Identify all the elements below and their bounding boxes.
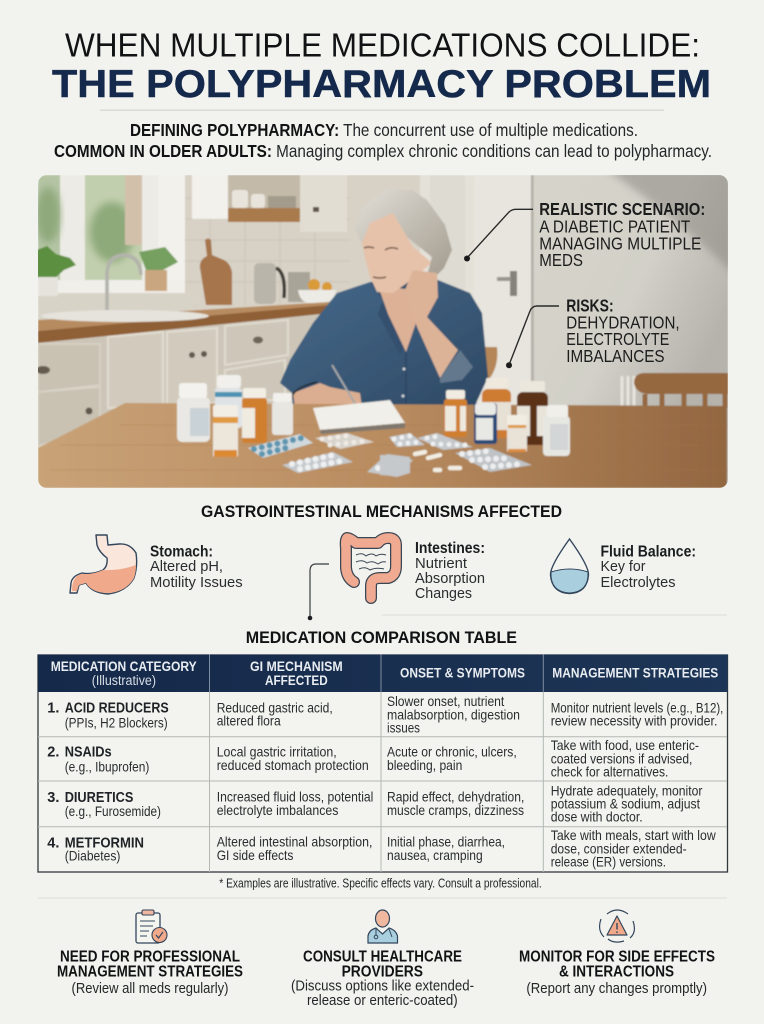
row 4: metformin: nausea, cramping bbox=[387, 847, 483, 863]
face bbox=[362, 213, 432, 293]
row 3: diuretics: Rapid effect, dehydration, bbox=[387, 789, 524, 805]
fluid balance text: Key for bbox=[600, 558, 646, 575]
table bbox=[38, 403, 727, 488]
row 2: NSAIDs: Acute or chronic, ulcers, bbox=[387, 744, 517, 760]
consult healthcare providers text: (Discuss options like extended- bbox=[291, 978, 474, 995]
row 1: acid reducers: ACID REDUCERS bbox=[65, 701, 169, 717]
row 2: NSAIDs: coated versions if advised, bbox=[551, 750, 692, 766]
table header: MANAGEMENT STRATEGIES bbox=[552, 665, 718, 680]
faucet bbox=[107, 255, 141, 310]
row 3: diuretics bbox=[47, 782, 703, 825]
row 1: acid reducers: Monitor nutrient levels (e.g., B12), bbox=[551, 699, 723, 715]
stomach text: Stomach: bbox=[150, 544, 213, 561]
row 3: diuretics: dose with doctor. bbox=[551, 809, 643, 825]
fluid balance text bbox=[600, 544, 696, 591]
consult healthcare providers text: CONSULT HEALTHCARE bbox=[303, 949, 462, 966]
intestines text: Intestines: bbox=[415, 540, 485, 557]
woman bbox=[280, 189, 488, 415]
consult healthcare providers text bbox=[291, 949, 474, 1009]
connector line bbox=[308, 564, 329, 620]
need for professional management text: (Review all meds regularly) bbox=[72, 980, 229, 997]
title: WHEN MULTIPLE MEDICATIONS COLLIDE: bbox=[65, 26, 700, 64]
fluid balance text: Fluid Balance: bbox=[600, 544, 696, 561]
left bottle group bbox=[177, 375, 293, 457]
heading: gastrointestinal mechanisms: GASTROINTESTINAL MECHANISMS AFFECTED bbox=[201, 503, 562, 521]
intestines text: Changes bbox=[415, 585, 472, 602]
need for professional management text bbox=[57, 949, 243, 997]
row 2: NSAIDs: bleeding, pain bbox=[387, 757, 462, 773]
plants bbox=[37, 246, 178, 296]
window bbox=[38, 175, 186, 294]
row 2: NSAIDs: check for alternatives. bbox=[551, 764, 668, 780]
shirt bbox=[280, 280, 488, 410]
row 4: metformin: release (ER) versions. bbox=[551, 854, 666, 870]
rolled sleeve bbox=[440, 350, 473, 383]
icon: water drop bbox=[550, 539, 589, 594]
table header bbox=[38, 654, 728, 692]
row 4: metformin: 4. bbox=[47, 835, 59, 851]
blister packs bbox=[248, 433, 532, 477]
intro text: DEFINING POLYPHARMACY: The concurrent use of multiple medications. bbox=[130, 120, 638, 140]
fluid balance text: Electrolytes bbox=[600, 574, 676, 591]
lower cabinets bbox=[36, 313, 330, 452]
row 1: acid reducers: Reduced gastric acid, bbox=[217, 699, 333, 715]
hair bbox=[355, 189, 452, 275]
row 2: NSAIDs: 2. bbox=[47, 745, 59, 761]
row 2: NSAIDs bbox=[47, 737, 699, 780]
callout: realistic scenario: MEDS bbox=[539, 250, 583, 270]
monitor for side effects text: (Report any changes promptly) bbox=[526, 980, 707, 997]
row 1: acid reducers: altered flora bbox=[217, 713, 281, 729]
stomach text: Altered pH, bbox=[150, 558, 223, 575]
raised hand and forearm bbox=[405, 270, 458, 378]
intro text bbox=[54, 120, 712, 161]
callout: risks bbox=[506, 295, 680, 368]
door bbox=[420, 175, 534, 415]
callout: realistic scenario bbox=[464, 199, 705, 270]
row 2: NSAIDs: Take with food, use enteric- bbox=[551, 737, 699, 753]
right bottle group bbox=[444, 378, 570, 456]
icon: clipboard with check bbox=[136, 910, 167, 943]
monitor for side effects text bbox=[519, 949, 715, 997]
upper cabinets and shelf bbox=[192, 175, 347, 232]
row 4: metformin: dose, consider extended- bbox=[551, 840, 687, 856]
callout: realistic scenario: MANAGING MULTIPLE bbox=[539, 233, 701, 253]
row 4: metformin: GI side effects bbox=[217, 847, 293, 863]
counter bbox=[38, 302, 330, 343]
row 4: metformin: Take with meals, start with low bbox=[551, 827, 716, 843]
callout: risks: DEHYDRATION, bbox=[566, 312, 680, 332]
fruit bowl bbox=[298, 279, 336, 303]
consult healthcare providers text: release or enteric-coated) bbox=[307, 992, 458, 1009]
intestines text bbox=[415, 540, 485, 602]
consult healthcare providers text: PROVIDERS bbox=[342, 964, 423, 981]
icon: doctor bbox=[368, 910, 398, 943]
medication comparison table bbox=[38, 654, 728, 872]
eyes and mouth bbox=[364, 247, 398, 278]
kettle bbox=[254, 263, 310, 304]
row 1: acid reducers: 1. bbox=[47, 701, 59, 717]
footnote: * Examples are illustrative. Specific effects vary. Consult a professional. bbox=[219, 876, 542, 890]
title bbox=[52, 26, 711, 106]
monitor for side effects text: MONITOR FOR SIDE EFFECTS bbox=[519, 949, 715, 966]
row 2: NSAIDs: (e.g., Ibuprofen) bbox=[65, 758, 149, 774]
row 3: diuretics: Hydrate adequately, monitor bbox=[551, 782, 703, 798]
row 3: diuretics: potassium & sodium, adjust bbox=[551, 796, 700, 812]
row 1: acid reducers: Slower onset, nutrient bbox=[387, 693, 504, 709]
table header: AFFECTED bbox=[265, 673, 328, 688]
row 2: NSAIDs: Local gastric irritation, bbox=[217, 744, 337, 760]
row 4: metformin bbox=[47, 827, 716, 870]
intestines text: Absorption bbox=[415, 570, 485, 587]
intro text: COMMON IN OLDER ADULTS: Managing complex chronic conditions can lead to polypharmacy. bbox=[54, 141, 712, 161]
need for professional management text: NEED FOR PROFESSIONAL bbox=[60, 949, 240, 966]
title: THE POLYPHARMACY PROBLEM bbox=[52, 63, 711, 106]
row 4: metformin: (Diabetes) bbox=[65, 848, 120, 864]
notebook bbox=[313, 400, 405, 434]
table header: GI MECHANISM bbox=[250, 659, 343, 674]
callout: risks: IMBALANCES bbox=[566, 346, 665, 366]
callout: realistic scenario: REALISTIC SCENARIO: bbox=[539, 199, 705, 219]
row 3: diuretics: Increased fluid loss, potential bbox=[217, 789, 373, 805]
monitor for side effects text: & INTERACTIONS bbox=[559, 964, 674, 981]
icon: stomach bbox=[70, 535, 137, 594]
table header: ONSET & SYMPTOMS bbox=[400, 665, 525, 680]
heading: comparison table: MEDICATION COMPARISON TABLE bbox=[246, 629, 517, 647]
row 1: acid reducers bbox=[47, 693, 723, 735]
writing arm bbox=[292, 382, 362, 405]
need for professional management text: MANAGEMENT STRATEGIES bbox=[57, 964, 243, 981]
row 4: metformin: Altered intestinal absorption, bbox=[217, 834, 372, 850]
row 3: diuretics: DIURETICS bbox=[65, 790, 134, 806]
row 1: acid reducers: malabsorption, digestion bbox=[387, 706, 520, 722]
table header: MEDICATION CATEGORY bbox=[51, 659, 197, 674]
photo: older woman at kitchen table with medications bbox=[36, 165, 740, 488]
row 3: diuretics: electrolyte imbalances bbox=[217, 802, 338, 818]
stomach text bbox=[150, 544, 243, 591]
callout: risks: ELECTROLYTE bbox=[566, 329, 669, 349]
stomach text: Motility Issues bbox=[150, 574, 243, 591]
row 2: NSAIDs: reduced stomach protection bbox=[217, 757, 369, 773]
intestines text: Nutrient bbox=[415, 555, 468, 572]
cutting board bbox=[200, 238, 232, 305]
row 4: metformin: METFORMIN bbox=[65, 835, 144, 851]
icon: warning with cycle arrows bbox=[600, 910, 634, 942]
row 3: diuretics: 3. bbox=[47, 790, 59, 806]
table header: (Illustrative) bbox=[92, 673, 156, 688]
row 1: acid reducers: issues bbox=[387, 719, 420, 735]
row 3: diuretics: (e.g., Furosemide) bbox=[65, 803, 161, 819]
callout: risks: RISKS: bbox=[566, 295, 614, 315]
loose pills bbox=[415, 452, 460, 470]
row 4: metformin: Initial phase, diarrhea, bbox=[387, 834, 505, 850]
row 3: diuretics: muscle cramps, dizziness bbox=[387, 802, 524, 818]
row 1: acid reducers: (PPIs, H2 Blockers) bbox=[65, 714, 168, 730]
right wall bbox=[534, 210, 678, 406]
chair bbox=[484, 347, 728, 408]
radiator bbox=[622, 376, 634, 406]
callout: realistic scenario: A DIABETIC PATIENT bbox=[539, 216, 691, 236]
neck and chest bbox=[378, 286, 417, 352]
row 1: acid reducers: review necessity with provider. bbox=[551, 713, 717, 729]
icon: intestines bbox=[346, 538, 396, 598]
row 2: NSAIDs: NSAIDs bbox=[65, 745, 112, 761]
kitchen wall bbox=[186, 197, 350, 304]
